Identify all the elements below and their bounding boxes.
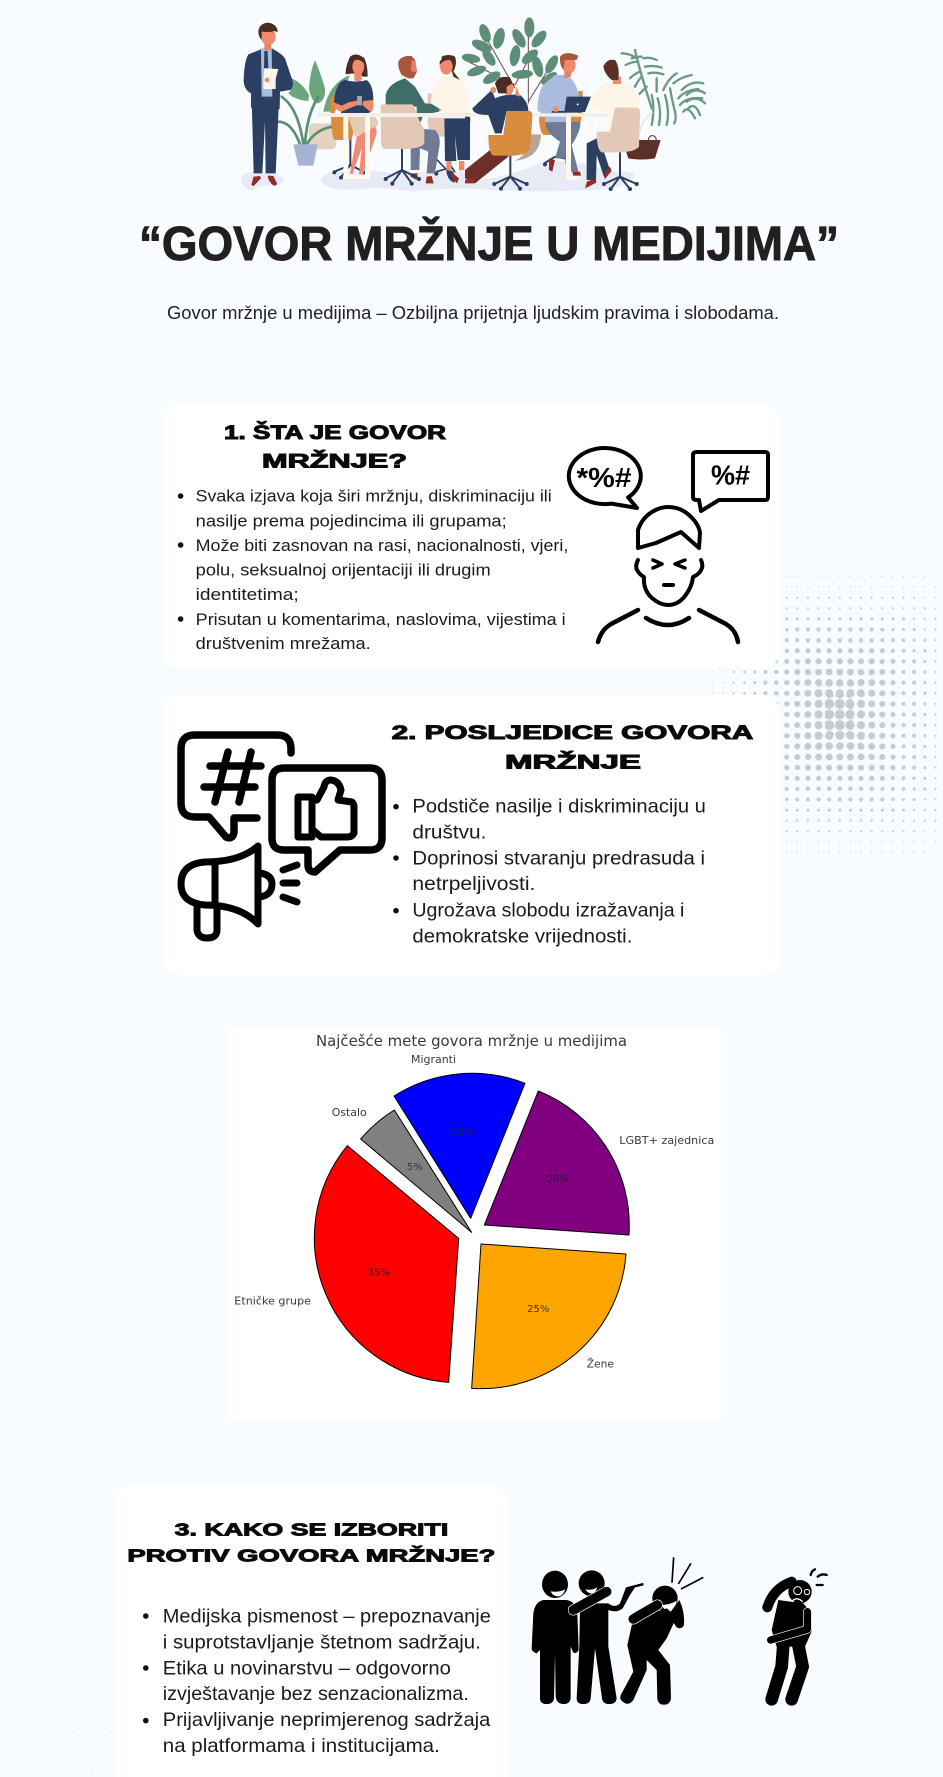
shout lines	[672, 1557, 703, 1589]
heading: section 3: 3. KAKO SE IZBORITI	[175, 1520, 448, 1540]
halftone dots right	[679, 545, 943, 885]
bullet list: section 3: i suprotstavljanje štetnom sadržaju.	[163, 1631, 481, 1653]
pie percentages: 35%	[368, 1268, 390, 1279]
bully 2 pointing	[573, 1570, 644, 1704]
bullet list: section 1: polu, seksualnoj orijentaciji ili drugim	[196, 561, 491, 580]
bullet list: section 3	[143, 1605, 491, 1757]
bullet list: section 1: društvenim mrežama.	[196, 634, 371, 653]
chart title: Najčešće mete govora mržnje u medijima	[316, 1032, 627, 1050]
pie labels: Ostalo	[332, 1106, 367, 1119]
pie labels: Etničke grupe	[234, 1294, 311, 1307]
pie percentages: 15%	[452, 1127, 474, 1138]
illustration: team meeting	[241, 17, 705, 192]
icon: bullies pointing and laughing at a victim	[532, 1557, 827, 1705]
bullet list: section 2: demokratske vrijednosti.	[412, 925, 632, 947]
panel: consequences of hate speech	[164, 695, 779, 975]
bullet list: section 2: Ugrožava slobodu izražavanja i	[412, 900, 684, 922]
bullet list: section 1: identitetima;	[196, 585, 299, 604]
bully 1	[532, 1571, 579, 1704]
pie percentages: 20%	[547, 1174, 569, 1185]
bullet list: section 3: Prijavljivanje neprimjerenog sadržaja	[163, 1709, 490, 1731]
lone victim	[767, 1569, 827, 1699]
bullet list: section 3: Etika u novinarstvu – odgovorno	[163, 1657, 451, 1679]
heading: section 1: MRŽNJE?	[262, 448, 407, 472]
heading: section 3	[127, 1520, 495, 1566]
title: “GOVOR MRŽNJE U MEDIJIMA”	[139, 216, 839, 271]
icon: hashtag, thumbs up and megaphone	[181, 735, 382, 938]
pie wedges	[314, 1073, 629, 1389]
pie labels: Migranti	[411, 1053, 456, 1066]
bullet list: section 1: Može biti zasnovan na rasi, nacionalnosti, vjeri,	[196, 536, 568, 555]
bullet list: section 2	[393, 795, 706, 947]
halftone dots bottom left	[29, 1728, 115, 1777]
panel: how to fight hate speech	[115, 1485, 507, 1777]
pie labels: Žene	[587, 1358, 614, 1371]
bullet list: section 1: Prisutan u komentarima, naslovima, vijestima i	[196, 610, 566, 629]
subtitle: Govor mržnje u medijima – Ozbiljna prijetnja ljudskim pravima i slobodama.	[167, 302, 779, 323]
heading: section 2: MRŽNJE	[505, 749, 641, 773]
panel: what is hate speech	[164, 405, 779, 668]
bullet list: section 1	[178, 487, 568, 653]
victim covering ears	[620, 1586, 684, 1705]
panel: pie chart	[228, 1028, 721, 1420]
icon: angry person with speech bubbles: *%#	[576, 462, 632, 493]
icon: angry person with speech bubbles: %#	[711, 459, 750, 490]
pie percentages: 5%	[407, 1162, 423, 1173]
heading: section 2	[392, 723, 753, 773]
pie labels: LGBT+ zajednica	[619, 1134, 714, 1147]
bullet list: section 2: netrpeljivosti.	[412, 873, 535, 895]
heading: section 1: 1. ŠTA JE GOVOR	[224, 420, 446, 444]
bullet list: section 1: nasilje prema pojedincima ili grupama;	[196, 512, 507, 531]
heading: section 2: 2. POSLJEDICE GOVORA	[392, 723, 753, 744]
pie percentages	[368, 1127, 569, 1315]
pie percentages: 25%	[527, 1304, 549, 1315]
illustration left half	[241, 23, 475, 192]
bullet list: section 2: Podstiče nasilje i diskriminaciju u	[412, 795, 706, 817]
bullet list: section 2: Doprinosi stvaranju predrasuda i	[412, 847, 705, 869]
bullet list: section 3: na platformama i institucijama.	[163, 1735, 440, 1757]
icon: angry person with speech bubbles	[569, 448, 768, 642]
heading: section 1	[224, 420, 446, 472]
bullet list: section 2: društvu.	[412, 821, 486, 843]
bullet list: section 3: Medijska pismenost – prepoznavanje	[163, 1605, 491, 1627]
bullet list: section 1: Svaka izjava koja širi mržnju, diskriminaciju ili	[196, 487, 552, 506]
illustration right half	[461, 17, 705, 191]
bullet list: section 3: izvještavanje bez senzacionalizma.	[163, 1683, 469, 1705]
heading: section 3: PROTIV GOVORA MRŽNJE?	[127, 1545, 495, 1566]
pie labels	[234, 1053, 714, 1371]
